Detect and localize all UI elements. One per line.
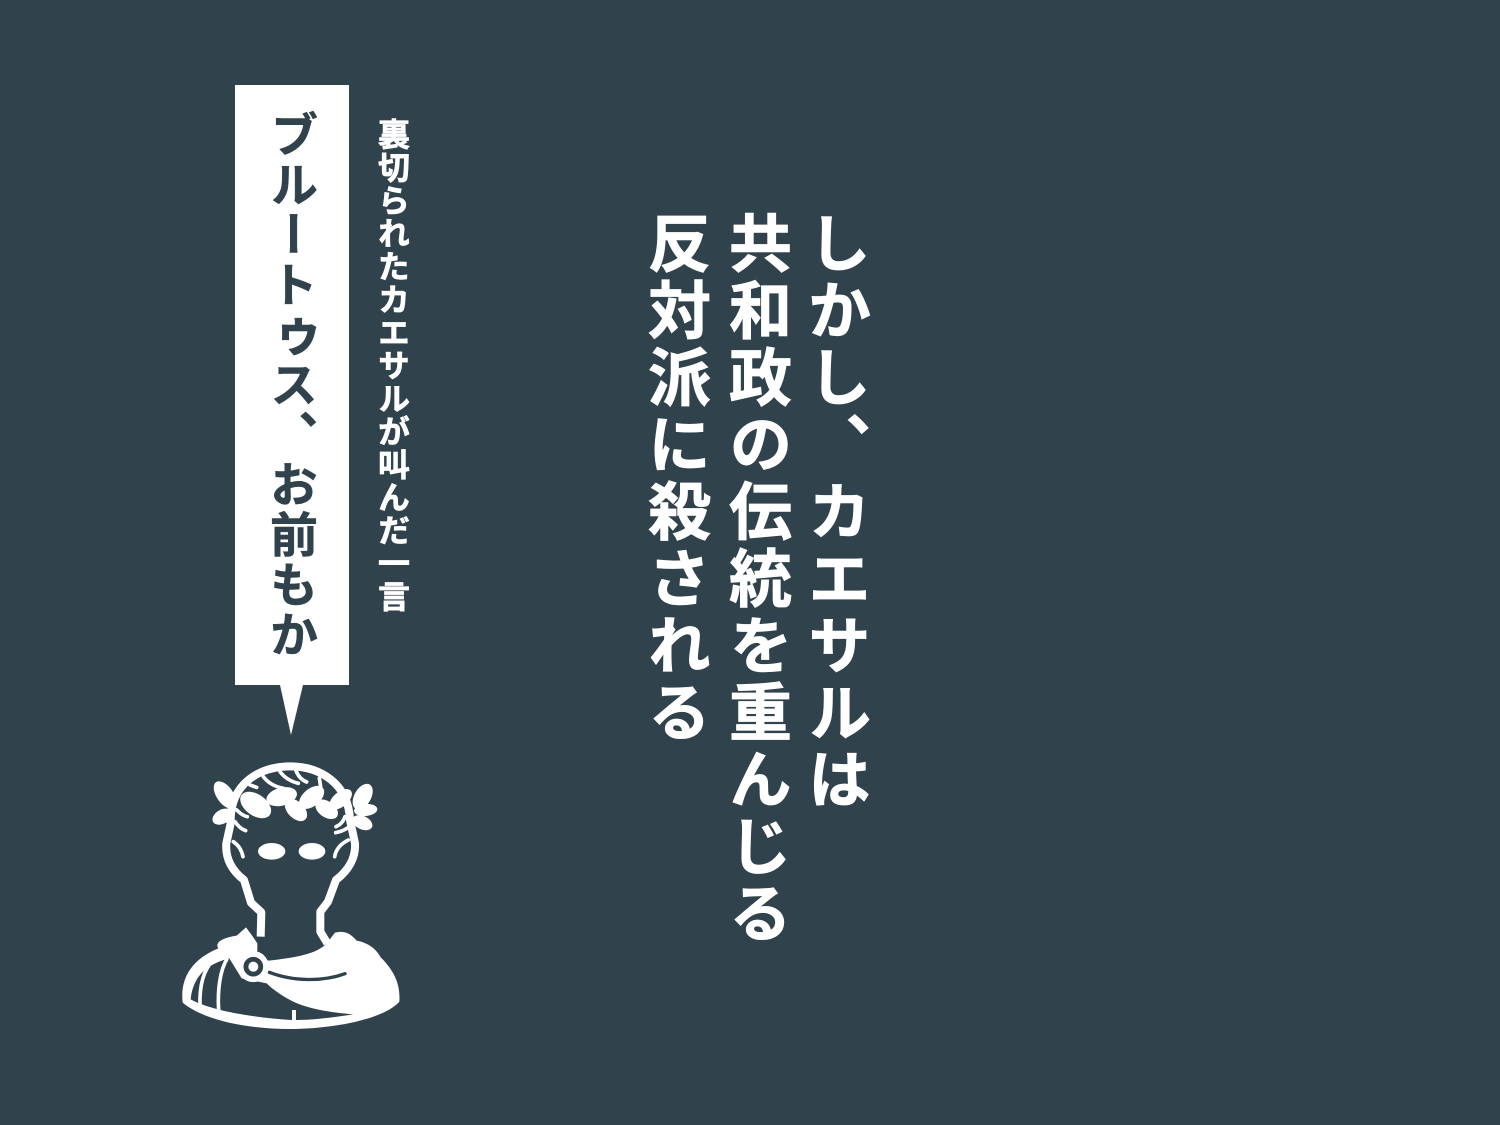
main text: line 2: 共和政の伝統を重んじる	[720, 211, 790, 948]
icon: Caesar bust with laurel wreath	[182, 762, 400, 1029]
brooch	[241, 954, 266, 979]
bubble tail	[280, 685, 303, 735]
main text: line 1: しかし、カエサルは	[799, 211, 869, 814]
hair strands	[233, 771, 353, 857]
cloak folds	[200, 958, 227, 1011]
laurel leaves	[209, 777, 378, 833]
head outline	[226, 766, 355, 943]
speech bubble	[235, 85, 349, 735]
cloak inner shadow	[191, 958, 353, 1020]
caption: Caesar's last words: 裏切られたカエサルが叫んだ一言	[374, 118, 410, 613]
bubble quote: ブルート ゥ ス、お前もか	[259, 110, 318, 660]
eyes	[258, 843, 285, 860]
shoulders and cloak	[182, 927, 399, 1029]
cloak crease	[269, 972, 345, 980]
main text: line 3: 反対派に殺される	[639, 211, 709, 747]
bubble box	[235, 85, 349, 685]
